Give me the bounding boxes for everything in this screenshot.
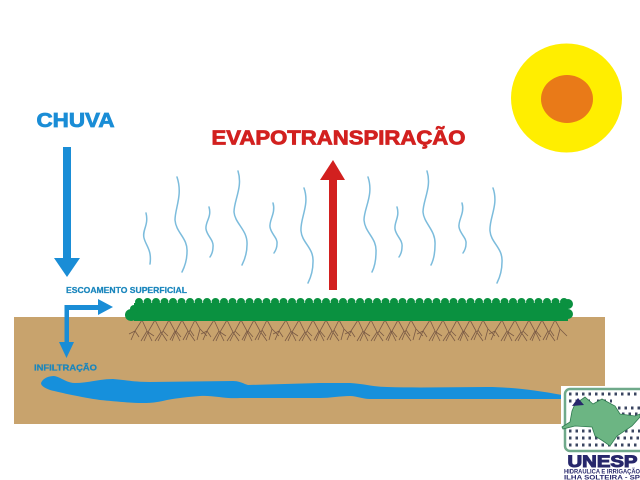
label: INFILTRAÇÃO: INFILTRAÇÃO [34,362,97,372]
logo [561,386,640,480]
logo map [562,397,640,446]
label: ESCOAMENTO SUPERFICIAL: ESCOAMENTO SUPERFICIAL [66,285,187,295]
arrow: runoff and infiltration [59,299,113,358]
sun outer disc [511,44,622,152]
title: EVAPOTRANSPIRAÇÃO: EVAPOTRANSPIRAÇÃO [212,126,466,150]
soil [14,317,605,424]
logo marker [572,398,584,406]
arrow: rain [54,147,80,277]
logo pattern [569,394,640,445]
logo background [561,386,640,480]
arrow: evapotranspiration [320,160,345,290]
sun [511,44,622,152]
logo frame [565,389,640,451]
vapour lines [144,171,502,283]
groundwater [41,376,562,403]
vegetation [125,299,573,321]
label: CHUVA: CHUVA [36,109,115,132]
logo wordmark: UNESP [568,453,638,471]
roots [129,320,567,341]
sun core [541,75,593,123]
